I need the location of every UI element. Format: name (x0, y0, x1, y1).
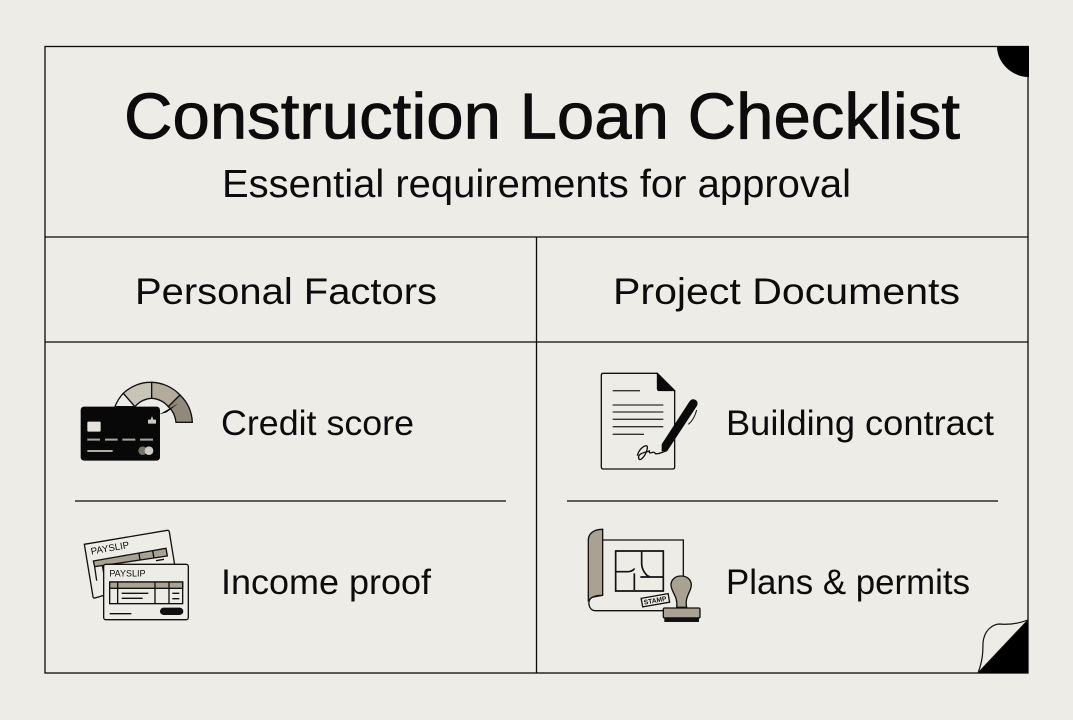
front payslip: PAYSLIP (109, 569, 145, 579)
corner: top right quarter circle (997, 46, 1029, 77)
floor plan (616, 551, 663, 591)
label: building contract: Building contract (726, 404, 994, 443)
back payslip: PAYSLIP (90, 540, 130, 558)
icon: blueprint and stamp (588, 529, 700, 621)
icon: signed contract and pen (601, 373, 697, 469)
heading: project documents: Project Documents (613, 271, 960, 312)
subtitle: Essential requirements for approval (222, 163, 851, 206)
label: income proof: Income proof (221, 563, 431, 602)
label: credit score: Credit score (221, 404, 414, 443)
icon: payslips (84, 530, 188, 620)
panel: checklist frame (45, 46, 1028, 673)
title: Construction Loan Checklist (124, 80, 960, 152)
label: plans and permits: Plans & permits (726, 563, 970, 602)
heading: personal factors: Personal Factors (135, 271, 437, 312)
icon: credit card and score gauge (81, 382, 192, 461)
stamp tool (663, 576, 700, 621)
corner: bottom right page curl (978, 620, 1028, 673)
stamp label: STAMP (643, 596, 668, 607)
